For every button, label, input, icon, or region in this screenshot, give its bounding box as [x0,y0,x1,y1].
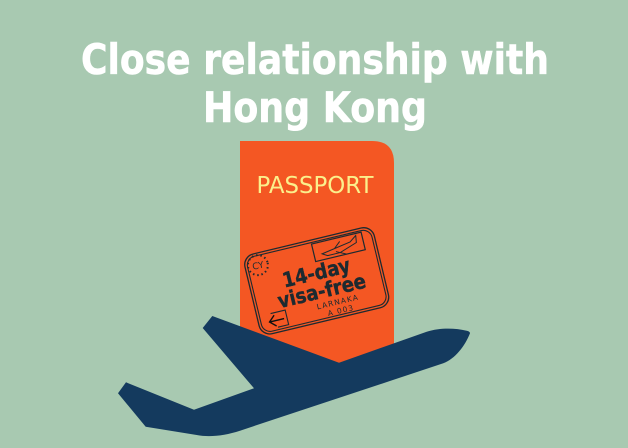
passport [240,141,394,363]
icon: CY seal: CY [251,260,266,273]
icon: arrow box [268,310,289,329]
icon: plane box [311,232,365,262]
visa stamp [242,225,391,336]
title [81,35,549,132]
stamp text: A 003 [327,303,355,318]
title: Hong Kong [203,83,427,132]
icon: CY seal [246,253,270,277]
stamp text [271,250,372,329]
stamp text: LARNAKA [316,293,360,311]
stamp text: visa-free [275,269,368,313]
passport cover [240,141,394,363]
title: Close relationship with [81,35,549,84]
stamp text: 14-day [280,253,353,292]
airplane [118,316,470,436]
passport label: PASSPORT [256,173,374,199]
